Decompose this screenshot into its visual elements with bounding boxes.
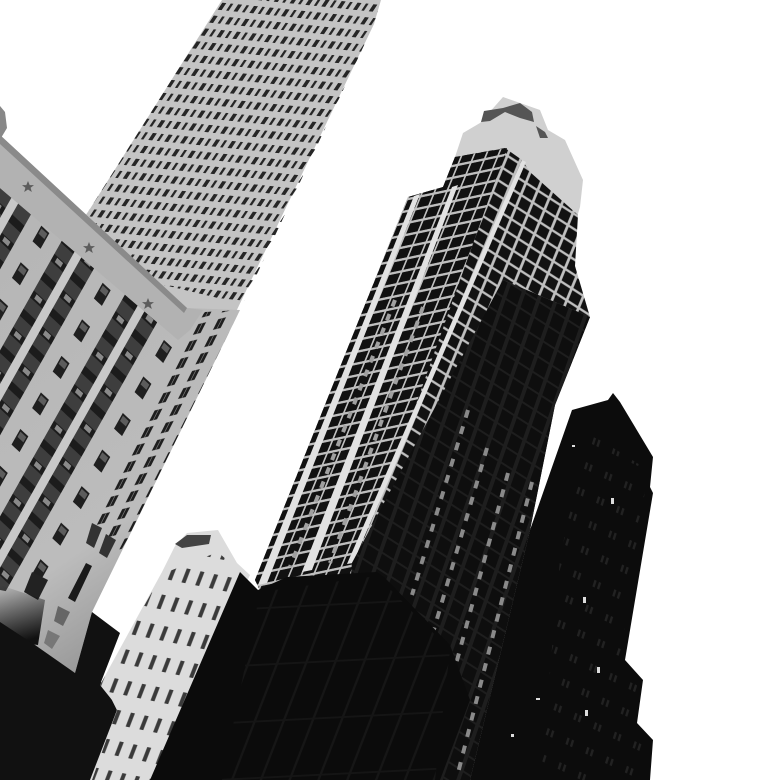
- building: right dark tower: [470, 393, 653, 780]
- pale panes: [290, 300, 423, 567]
- building: small white tower: [90, 530, 250, 780]
- small paired windows on right bay: [92, 310, 240, 552]
- pale windows in shadow: [412, 410, 532, 778]
- shadowed facade: [350, 280, 590, 780]
- lit side facade: [255, 148, 590, 595]
- building: tall grey tower: [20, 0, 381, 640]
- lit front bays: [255, 148, 507, 595]
- white piers: [258, 160, 526, 585]
- building: central lit tower: [255, 97, 590, 780]
- building: dark block at lower left: [0, 612, 120, 780]
- roof ornament: [0, 106, 7, 138]
- cornice with stars: [0, 135, 203, 340]
- building: low dark foreground block: [150, 572, 470, 780]
- crown: [443, 97, 590, 317]
- entrance and lower windows: [24, 523, 116, 649]
- roof equipment: [175, 535, 211, 548]
- large window bays: [0, 188, 178, 598]
- lit window specks: [511, 445, 614, 737]
- building: left stone building: [0, 106, 240, 673]
- base shadow: [0, 585, 45, 645]
